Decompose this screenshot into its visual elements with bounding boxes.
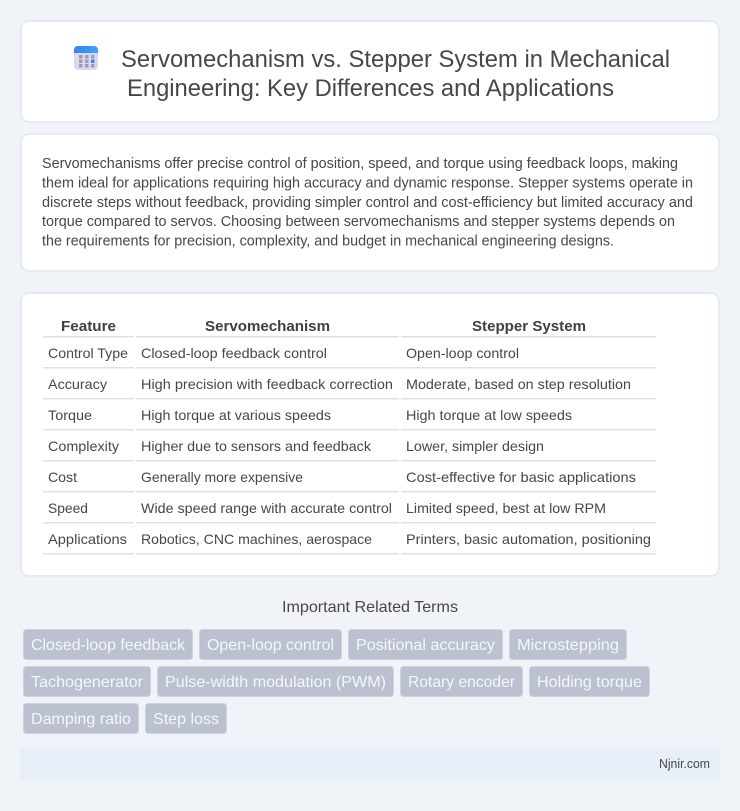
row: cost: Cost xyxy=(48,469,77,485)
row: cost: Generally more expensive xyxy=(141,469,303,485)
tag: positional accuracy xyxy=(348,630,502,660)
footer: Njnir.com xyxy=(659,756,710,771)
row: torque: High torque at low speeds xyxy=(406,407,572,423)
panel: summary paragraph xyxy=(21,134,719,271)
row: torque: High torque at various speeds xyxy=(141,407,331,423)
row: accuracy: Accuracy xyxy=(48,376,107,392)
tag: microstepping: Microstepping xyxy=(517,637,619,654)
tag: step loss: Step loss xyxy=(153,711,219,728)
tag: damping ratio: Damping ratio xyxy=(31,711,131,728)
row: complexity xyxy=(48,438,544,454)
row: complexity: Lower, simpler design xyxy=(406,438,544,454)
tag: open-loop control: Open-loop control xyxy=(207,637,334,654)
row: torque xyxy=(48,407,572,423)
row: control type: Control Type xyxy=(48,345,128,361)
row: torque: Torque xyxy=(48,407,92,423)
tag: holding torque: Holding torque xyxy=(537,674,642,691)
text block: summary xyxy=(42,156,693,250)
tag: rotary encoder xyxy=(400,666,522,696)
table header row: Feature xyxy=(61,319,116,335)
row: complexity: Higher due to sensors and feedback xyxy=(141,438,372,454)
footer xyxy=(20,747,720,781)
tag: tachogenerator: Tachogenerator xyxy=(31,674,144,691)
text block: summary: torque compared to servos. Choosing between servomechanisms and stepper systems depends on xyxy=(42,214,675,230)
title: Engineering: Key Differences and Applications xyxy=(127,75,614,102)
row: accuracy: Moderate, based on step resolution xyxy=(406,376,631,392)
tag: pulse-width modulation: Pulse-width modulation (PWM) xyxy=(165,674,386,691)
tag: closed-loop feedback: Closed-loop feedback xyxy=(31,637,186,654)
row: complexity: Complexity xyxy=(48,438,119,454)
tag: rotary encoder: Rotary encoder xyxy=(408,674,516,691)
title xyxy=(121,46,670,102)
row: speed: Wide speed range with accurate control xyxy=(141,500,392,516)
tag: tachogenerator xyxy=(24,666,150,696)
tags: related terms xyxy=(24,630,650,734)
title: Servomechanism vs. Stepper System in Mechanical xyxy=(121,46,670,73)
row: control type xyxy=(48,345,519,361)
tag: step loss xyxy=(146,704,226,734)
row: applications xyxy=(48,531,651,547)
text block: summary: Servomechanisms offer precise control of position, speed, and torque using feedback loops, making xyxy=(42,156,678,172)
heading: related terms: Important Related Terms xyxy=(282,599,458,616)
row: applications: Robotics, CNC machines, aerospace xyxy=(141,531,372,547)
row: applications: Printers, basic automation, positioning xyxy=(406,531,651,547)
row: speed: Limited speed, best at low RPM xyxy=(406,500,606,516)
text block: summary: the requirements for precision, complexity, and budget in mechanical engineering designs. xyxy=(42,234,614,250)
panel: header xyxy=(21,21,719,122)
row: speed: Speed xyxy=(48,500,88,516)
row: accuracy: High precision with feedback correction xyxy=(141,376,393,392)
row: accuracy xyxy=(48,376,631,392)
row: control type: Open-loop control xyxy=(406,345,519,361)
row: cost: Cost-effective for basic applications xyxy=(406,469,636,485)
row: cost xyxy=(48,469,636,485)
icon: calendar grid xyxy=(74,46,98,70)
text block: summary: discrete steps without feedback, providing simpler control and cost-efficiency but limited accuracy and xyxy=(42,195,693,211)
tag: microstepping xyxy=(510,630,626,660)
tag: holding torque xyxy=(530,666,650,696)
tag: damping ratio xyxy=(24,704,138,734)
tag: pulse-width modulation xyxy=(158,666,394,696)
tag: closed-loop feedback xyxy=(24,630,192,660)
table header row: Stepper System xyxy=(472,319,586,335)
text block: summary: them ideal for applications requiring high accuracy and dynamic response. Stepper systems operate in xyxy=(42,176,693,192)
table header row: Servomechanism xyxy=(205,319,330,335)
panel: comparison table xyxy=(21,293,719,576)
tag: open-loop control xyxy=(200,630,342,660)
row: speed xyxy=(48,500,606,516)
row: applications: Applications xyxy=(48,531,127,547)
row: control type: Closed-loop feedback control xyxy=(141,345,327,361)
tag: positional accuracy: Positional accuracy xyxy=(356,637,495,654)
table header row xyxy=(61,319,586,335)
